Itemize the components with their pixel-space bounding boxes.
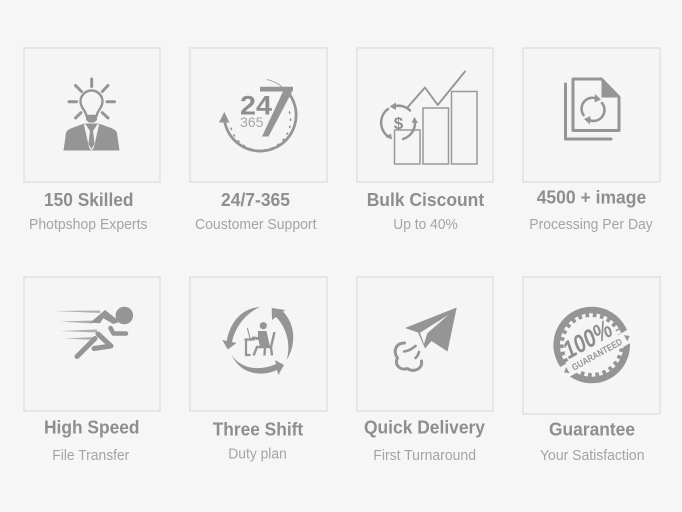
icon: person at desk in cycle arrows: [222, 307, 293, 375]
panel: 4500 + image: [523, 48, 660, 233]
text: Duty plan: Duty plan: [228, 446, 287, 462]
heading: Quick Delivery: Quick Delivery: [364, 416, 486, 438]
text: File Transfer: File Transfer: [52, 448, 129, 464]
panel: quick delivery: [357, 277, 493, 464]
heading: Bulk Ciscount: Bulk Ciscount: [367, 189, 484, 210]
card frame: delivery: [357, 277, 493, 411]
panel: bulk discount: [357, 48, 493, 233]
heading: Three Shift: Three Shift: [213, 419, 303, 440]
icon: 100% guaranteed seal: GUARANTEED: [570, 337, 625, 373]
panel: 24/7-365: [190, 48, 327, 233]
heading: 4500 + image: 4500 + image: [537, 186, 646, 208]
heading: 24/7-365: 24/7-365: [221, 189, 290, 210]
heading: Guarantee: Guarantee: [549, 419, 635, 440]
panel: 150 skilled: [24, 48, 160, 233]
icon: paper plane with smoke cloud: [395, 308, 457, 370]
panel: high speed: [24, 277, 160, 464]
card frame: images: [523, 48, 660, 182]
icon: running figure: [54, 307, 133, 356]
card frame: skilled: [24, 48, 160, 182]
card frame: shift: [190, 277, 327, 411]
icon: 24/7 365 clock: [219, 80, 296, 151]
text: Photpshop Experts: Photpshop Experts: [29, 217, 148, 233]
text: Coustomer Support: Coustomer Support: [195, 217, 316, 233]
icon: bar chart with dollar cycle: $: [394, 114, 404, 133]
card frame: bulk: [357, 48, 493, 182]
panel: three shift: [190, 277, 327, 462]
text: Up to 40%: Up to 40%: [393, 217, 458, 233]
icon: 24/7 365 clock: 24: [240, 90, 272, 120]
card frame: support: [190, 48, 327, 182]
heading: High Speed: High Speed: [44, 416, 140, 438]
icon: 24/7 365 clock: 365: [240, 114, 264, 130]
text: Your Satisfaction: Your Satisfaction: [540, 448, 644, 464]
card frame: speed: [24, 277, 160, 411]
text: Processing Per Day: Processing Per Day: [529, 217, 654, 233]
icon: person with light bulb head: [64, 79, 120, 150]
icon: documents with sync arrows: [566, 79, 619, 139]
heading: 150 Skilled: 150 Skilled: [44, 189, 134, 210]
text: First Turnaround: First Turnaround: [373, 448, 476, 464]
card frame: guarantee: [523, 277, 660, 414]
icon: 100% guaranteed seal: [539, 292, 645, 398]
panel: guarantee: [523, 277, 660, 464]
icon: 100% guaranteed seal: 100%: [558, 315, 617, 365]
icon: bar chart with dollar cycle: [381, 72, 477, 164]
